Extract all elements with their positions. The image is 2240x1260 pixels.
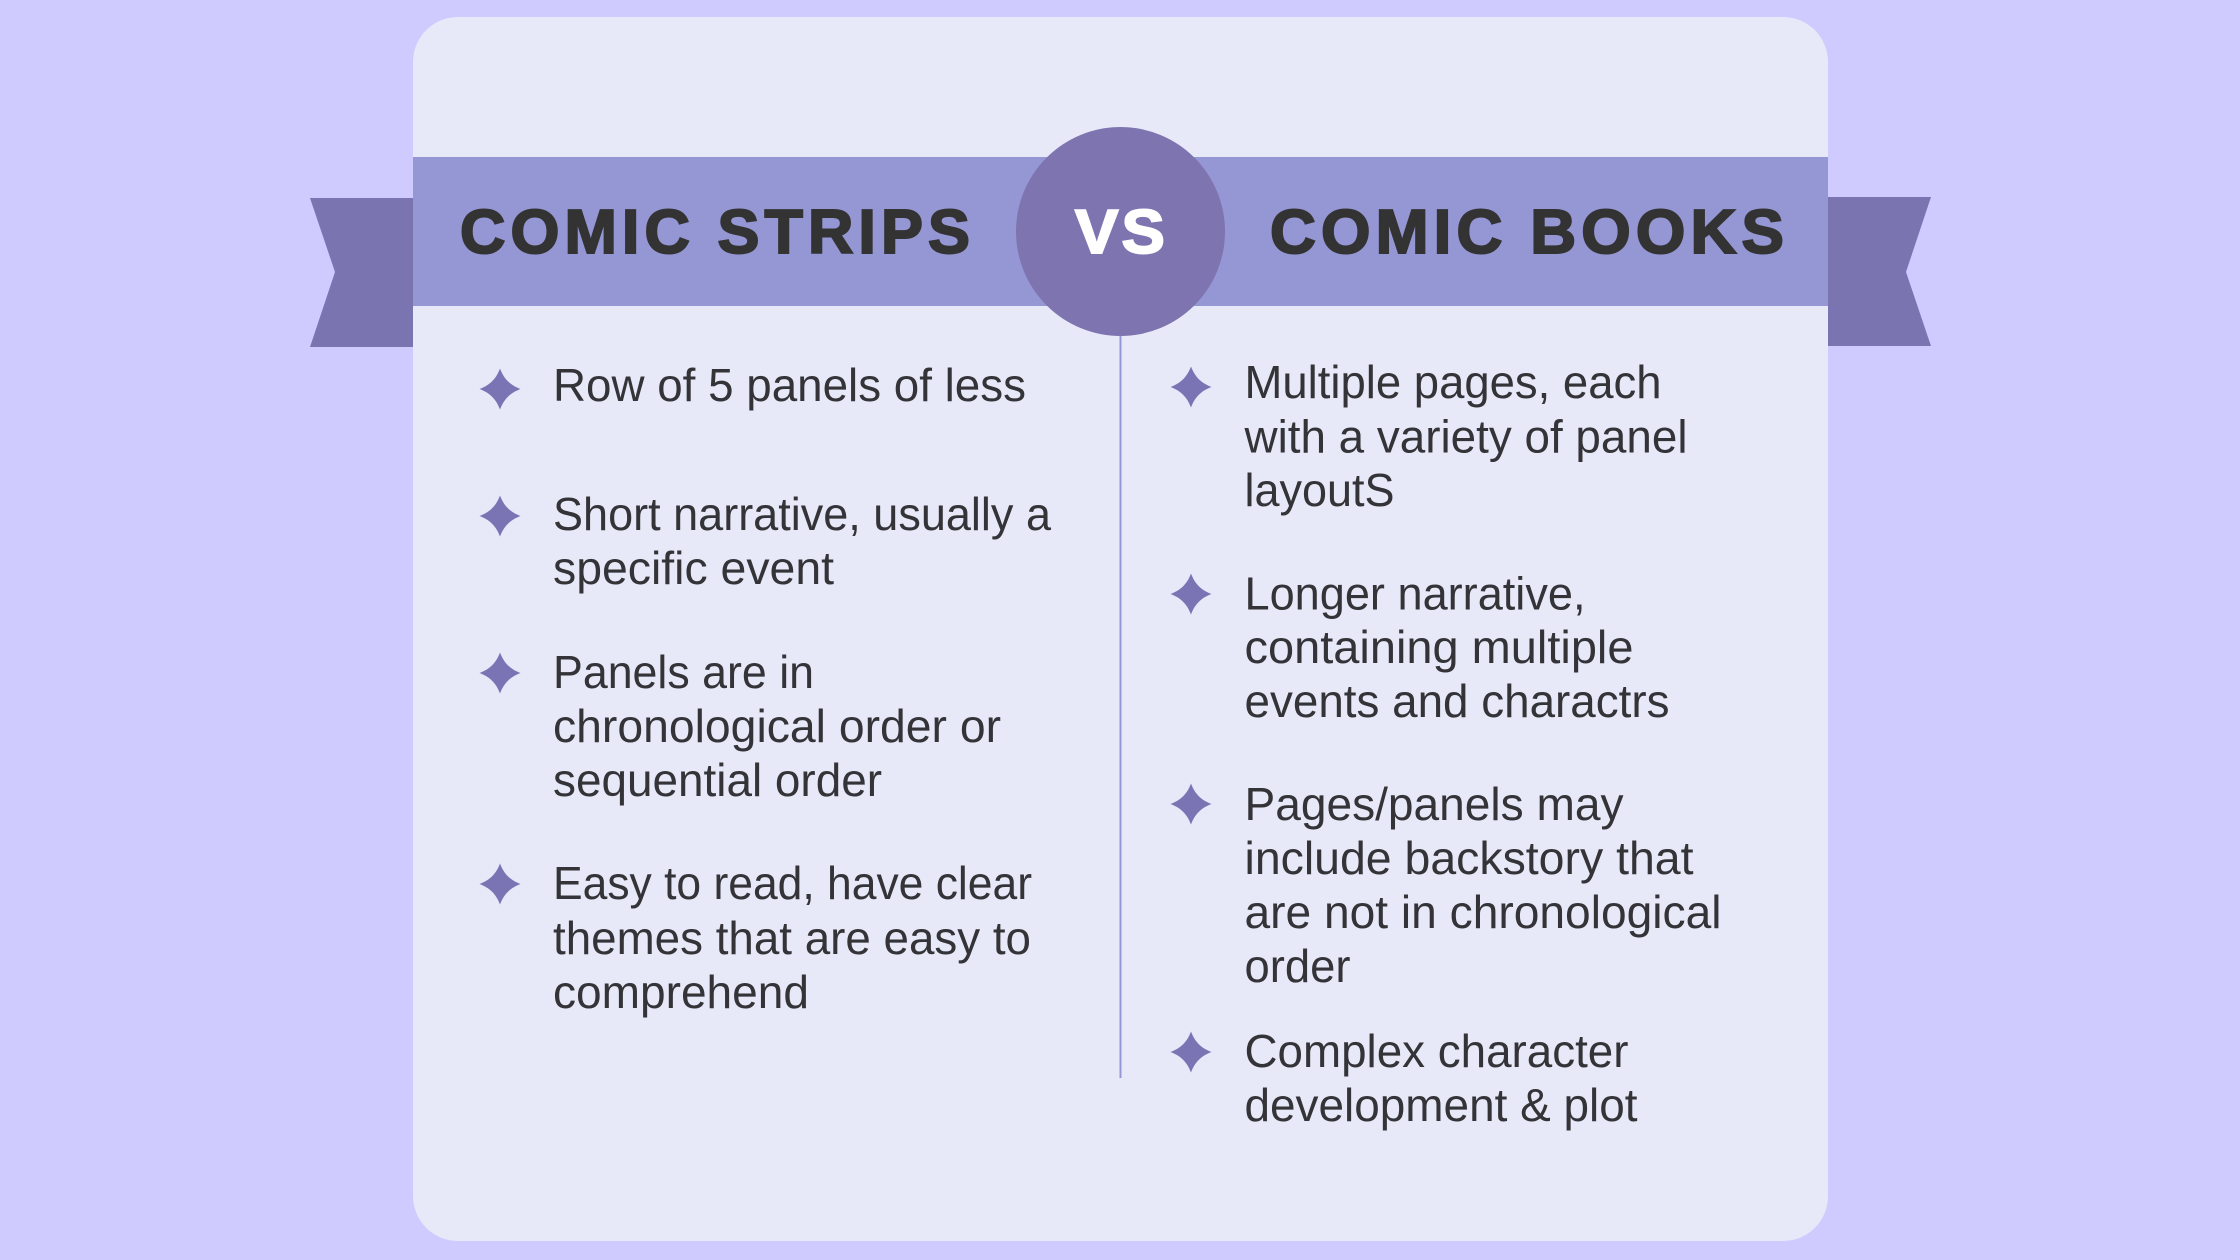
center divider line [1120,330,1122,1078]
item: easy to read: comprehend [553,966,809,1018]
item: short narrative: specific event [553,542,834,594]
item: complex character: development & plot [1244,1079,1638,1131]
banner [413,157,1828,306]
column: comic books list [1170,356,1722,1131]
ribbon tail: right [1828,197,1931,346]
item: short narrative: Short narrative, usually a [553,488,1051,540]
item: easy to read: themes that are easy to [553,912,1031,964]
badge: VS: VS [1075,198,1168,267]
item: backstory: include backstory that [1244,832,1694,884]
item: easy to read [480,857,1032,1018]
item: longer narrative: Longer narrative, [1244,568,1586,620]
item: longer narrative [1170,568,1670,727]
item: panels order: chronological order or [553,700,1001,752]
item: backstory: Pages/panels may [1244,778,1624,830]
item: row of panels: Row of 5 panels of less [553,359,1026,411]
item: multiple pages: Multiple pages, each [1244,356,1662,408]
item: longer narrative: events and charactrs [1244,675,1670,727]
item: complex character: Complex character [1244,1025,1628,1077]
item: panels order: Panels are in [553,646,814,698]
heading: comic strips: COMIC STRIPS [460,198,975,267]
item: multiple pages [1170,356,1688,516]
heading: comic books: COMIC BOOKS [1270,198,1789,267]
item: backstory: are not in chronological [1244,886,1722,938]
item: easy to read: Easy to read, have clear [553,857,1032,909]
item: longer narrative: containing multiple [1244,621,1634,673]
column: comic strips list [480,359,1051,1018]
panel: main card [413,17,1828,1241]
item: multiple pages: layoutS [1244,464,1394,516]
item: panels order [480,646,1001,806]
ribbon tail: left [310,198,413,347]
item: backstory [1170,778,1722,992]
item: complex character [1170,1025,1638,1131]
item: panels order: sequential order [553,754,882,806]
item: short narrative [480,488,1051,594]
item: multiple pages: with a variety of panel [1244,410,1688,462]
item: backstory: order [1244,940,1350,992]
badge: VS [1016,127,1225,336]
